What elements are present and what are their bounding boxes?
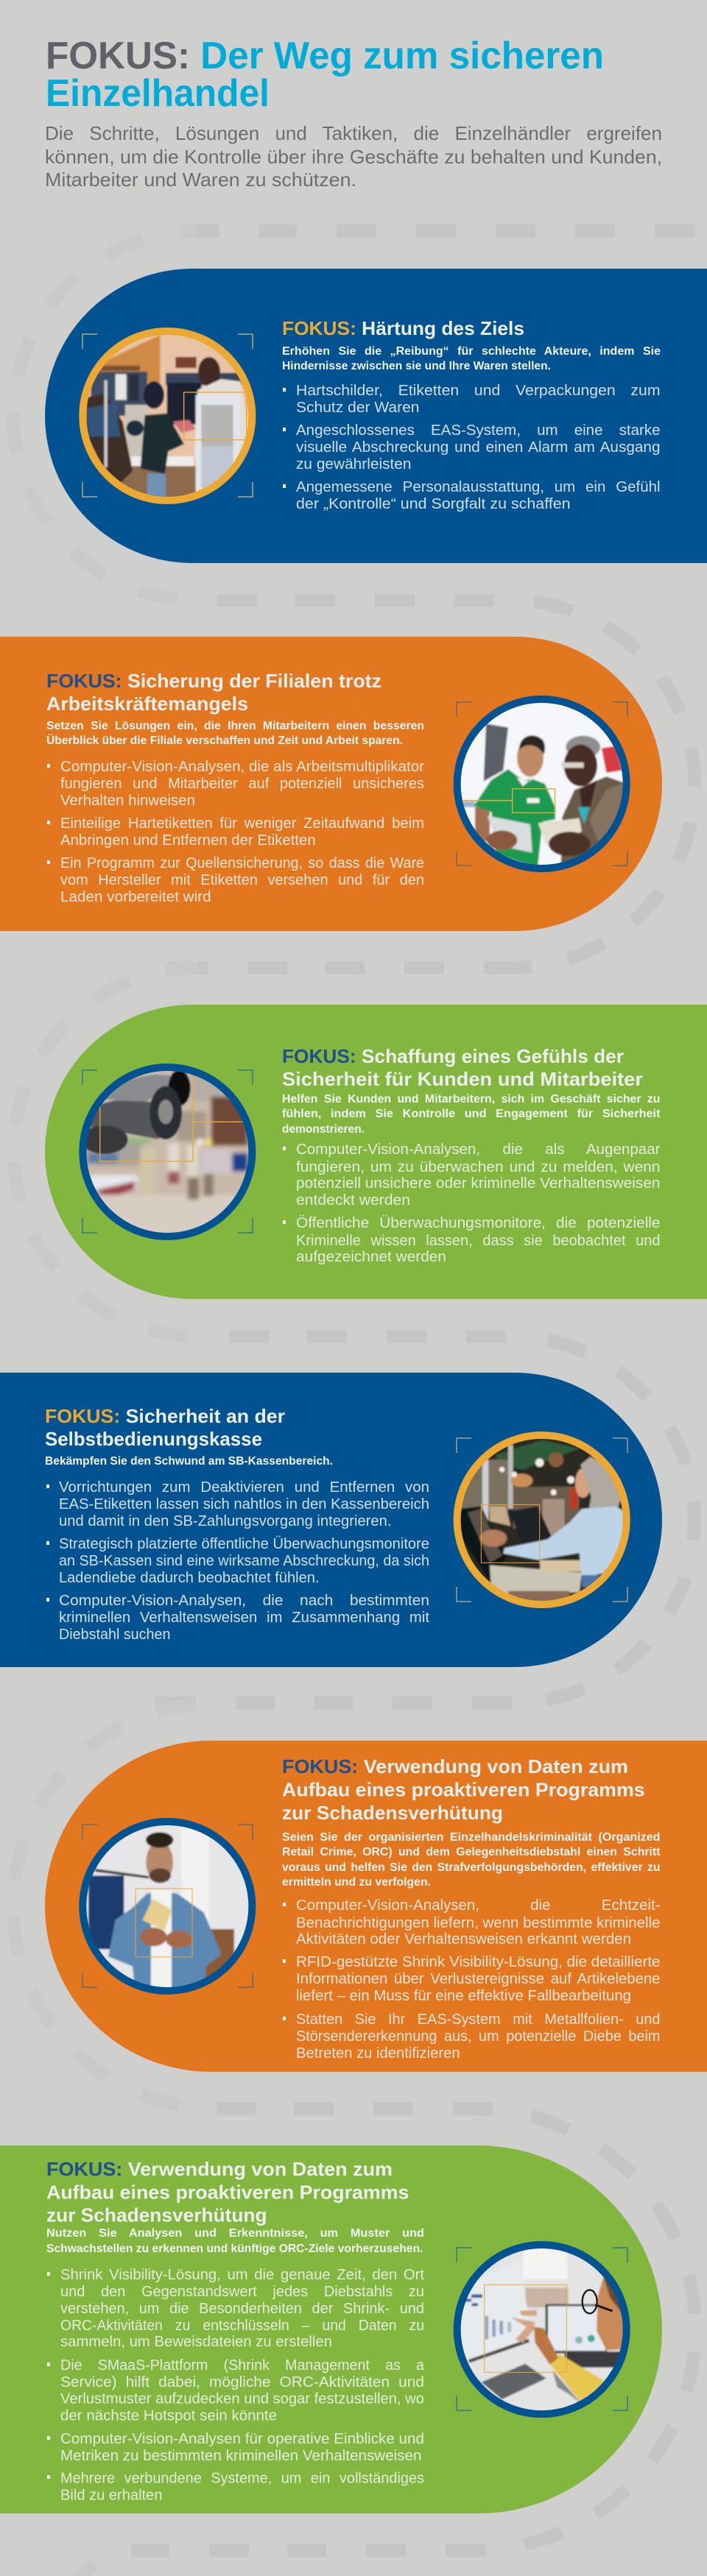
bullet list: ORC-Aktivitäten zu entschlüsseln – und Daten zu bbox=[60, 2318, 424, 2334]
bullet list bbox=[283, 1897, 660, 2062]
bullet list: Computer-Vision-Analysen für operative Einblicke und bbox=[60, 2431, 424, 2447]
intro text: Die Schritte, Lösungen und Taktiken, die Einzelhändler ergreifen bbox=[45, 122, 662, 144]
bullet list: Ein Programm zur Quellensicherung, so dass die Ware bbox=[60, 855, 424, 871]
photo: security camera bbox=[81, 1067, 256, 1239]
title bbox=[46, 35, 604, 115]
corner brackets bbox=[457, 702, 627, 866]
panel: Selbstbedienungskasse bbox=[0, 1373, 662, 1667]
heading bbox=[282, 1045, 643, 1090]
corner brackets bbox=[82, 1070, 253, 1233]
bullet list bbox=[283, 1142, 661, 1265]
subheading: Retail Crime, ORC) und dem Gelegenheitsdiebstahl einen Schritt bbox=[282, 1846, 661, 1858]
bullet list: Hartschilder, Etiketten und Verpackungen zum bbox=[296, 383, 660, 399]
heading: zur Schadensverhütung bbox=[282, 1802, 503, 1824]
bullet list: Mehrere verbundene Systeme, um ein vollständiges bbox=[60, 2470, 424, 2486]
intro text bbox=[45, 122, 662, 191]
title: FOKUS: Der Weg zum sicheren bbox=[46, 35, 604, 77]
photo: man hiding item bbox=[81, 1822, 256, 1993]
subheading bbox=[282, 1831, 661, 1889]
subheading: Seien Sie der organisierten Einzelhandelskriminalität (Organized bbox=[282, 1831, 660, 1844]
panel: proaktives Programm (green) bbox=[0, 2145, 662, 2513]
bullet list: der „Kontrolle“ und Sorgfalt zu schaffen bbox=[296, 496, 571, 512]
bullet list: liefert – ein Muss für eine effektive Fallbearbeitung bbox=[296, 1988, 631, 2004]
subheading bbox=[282, 1093, 661, 1136]
bullet list bbox=[46, 1479, 429, 1643]
heading bbox=[46, 670, 381, 715]
bullet list: Betreten zu identifizieren bbox=[296, 2045, 460, 2062]
heading: FOKUS: Verwendung von Daten zum bbox=[46, 2158, 393, 2180]
bullet list: Computer-Vision-Analysen, die als Arbeitsmultiplikator bbox=[60, 759, 424, 775]
bullet list bbox=[47, 2267, 425, 2504]
panel: Härtung des Ziels bbox=[45, 269, 707, 563]
subheading bbox=[46, 720, 424, 747]
heading: FOKUS: Sicherheit an der bbox=[45, 1405, 285, 1427]
bullet list: vom Hersteller mit Etiketten versehen und für den bbox=[60, 872, 424, 888]
subheading: ermitteln und zu verfolgen. bbox=[282, 1876, 431, 1889]
bullet list: aufgezeichnet werden bbox=[296, 1249, 446, 1265]
bullet list: zu gewährleisten bbox=[296, 456, 411, 473]
heading: FOKUS: Härtung des Ziels bbox=[282, 317, 524, 339]
subheading: voraus und helfen Sie den Strafverfolgungsbehörden, effektiver zu bbox=[282, 1861, 660, 1874]
bullet list: Aktivitäten oder Verhaltensweisen erkannt werden bbox=[296, 1931, 631, 1947]
heading: Aufbau eines proaktiveren Programms bbox=[282, 1778, 645, 1800]
bullet list: an SB-Kassen sind eine wirksame Abschreckung, da sich bbox=[59, 1553, 429, 1569]
corner brackets bbox=[457, 2248, 627, 2410]
heading: zur Schadensverhütung bbox=[46, 2204, 267, 2226]
bullet list: Shrink Visibility-Lösung, um die genaue Zeit, den Ort bbox=[60, 2267, 424, 2283]
intro text: Mitarbeiter und Waren zu schützen. bbox=[45, 169, 356, 191]
subheading: Schwachstellen zu erkennen und künftige ORC-Ziele vorherzusehen. bbox=[46, 2243, 423, 2255]
intro text: können, um die Kontrolle über ihre Geschäfte zu behalten und Kunden, bbox=[45, 146, 662, 168]
bullet list: Computer-Vision-Analysen, die als Augenpaar bbox=[296, 1142, 661, 1158]
photo: staff and customer bbox=[457, 699, 628, 871]
bullet list: Einteilige Hartetiketten für weniger Zeitaufwand beim bbox=[60, 815, 424, 832]
bullet list: Angeschlossenes EAS-System, um eine starke bbox=[296, 422, 660, 439]
bullet list: Computer-Vision-Analysen, die Echtzeit- bbox=[296, 1897, 660, 1914]
subheading: Erhöhen Sie die „Reibung“ für schlechte Akteure, indem Sie bbox=[282, 345, 661, 358]
bullet list: Computer-Vision-Analysen, die nach bestimmten bbox=[59, 1593, 429, 1609]
heading: FOKUS: Sicherung der Filialen trotz bbox=[46, 670, 381, 692]
bullet list: Benachrichtigungen liefern, wenn bestimmte kriminelle bbox=[296, 1915, 660, 1931]
heading bbox=[45, 1405, 285, 1450]
subheading bbox=[46, 2227, 424, 2255]
bullet list: RFID-gestützte Shrink Visibility-Lösung, die detaillierte bbox=[296, 1954, 660, 1970]
bullet list: verstehen, um die Besonderheiten der Shrink- und bbox=[60, 2301, 424, 2317]
subheading: demonstrieren. bbox=[282, 1123, 365, 1136]
photo: store kiosk bbox=[81, 331, 253, 503]
bullet list: EAS-Etiketten lassen sich nahtlos in den Kassenbereich bbox=[59, 1496, 429, 1512]
bullet list: Öffentliche Überwachungsmonitore, die potenzielle bbox=[296, 1215, 660, 1231]
bullet list: der nächste Hotspot sein könnte bbox=[60, 2408, 277, 2424]
subheading: Überblick über die Filiale verschaffen und Zeit und Arbeit sparen. bbox=[46, 733, 403, 747]
photo: analyst at monitors bbox=[457, 2245, 628, 2416]
bullet list: und den Gegenstandswert jedes Diebstahls zu bbox=[60, 2284, 424, 2300]
heading: Selbstbedienungskasse bbox=[45, 1428, 262, 1450]
heading: FOKUS: Verwendung von Daten zum bbox=[282, 1755, 628, 1777]
bullet list: potenziell unsichere oder kriminelle Verhaltensweisen bbox=[296, 1175, 660, 1192]
heading bbox=[46, 2158, 409, 2226]
panel: Sicherung der Filialen bbox=[0, 637, 662, 931]
corner brackets bbox=[82, 1825, 253, 1987]
bullet list bbox=[47, 759, 424, 905]
bullet list bbox=[283, 383, 660, 512]
subheading: Helfen Sie Kunden und Mitarbeitern, sich im Geschäft sicher zu bbox=[282, 1093, 660, 1105]
bullet list: Diebstahl suchen bbox=[59, 1627, 171, 1643]
subheading: Nutzen Sie Analysen und Erkenntnisse, um Muster und bbox=[46, 2227, 424, 2240]
bullet list: Metriken zu bestimmten kriminellen Verhaltensweisen bbox=[60, 2448, 421, 2464]
panel: Gefühl der Sicherheit bbox=[45, 1005, 707, 1299]
photo: self-checkout bbox=[457, 1435, 628, 1607]
bullet list: Verhalten hinweisen bbox=[60, 793, 195, 809]
bullet list: Informationen über Verlustereignisse auf Artikelebene bbox=[296, 1971, 660, 1987]
bullet list: Bild zu erhalten bbox=[60, 2488, 162, 2504]
bullet list: und damit in den SB-Zahlungsvorgang integrieren. bbox=[59, 1513, 392, 1529]
subheading: fühlen, indem Sie Kontrolle und Engagement für Sicherheit bbox=[282, 1108, 661, 1120]
bullet list: Statten Sie Ihr EAS-System mit Metallfolien- und bbox=[296, 2011, 660, 2028]
bullet list: fungieren, um zu überwachen und zu melden, wenn bbox=[296, 1159, 660, 1175]
heading: Arbeitskräftemangels bbox=[46, 693, 248, 715]
bullet list: fungieren und Mitarbeiter auf potenziell unsicheres bbox=[60, 776, 424, 792]
bullet list: sammeln, um Beweisdateien zu erstellen bbox=[60, 2334, 332, 2350]
bullet list: Service) hilft dabei, mögliche ORC-Aktivitäten und bbox=[60, 2374, 424, 2391]
bullet list: Ladendiebe dadurch beobachtet fühlen. bbox=[59, 1570, 320, 1586]
bullet list: Kriminelle wissen lassen, dass sie beobachtet und bbox=[296, 1233, 660, 1249]
bullet list: Verlustmuster aufzudecken und sogar festzustellen, wo bbox=[60, 2391, 424, 2407]
bullet list: Strategisch platzierte öffentliche Überwachungsmonitore bbox=[59, 1536, 429, 1552]
heading: Sicherheit für Kunden und Mitarbeiter bbox=[282, 1068, 643, 1090]
bullet list: visuelle Abschreckung und einen Alarm am Ausgang bbox=[296, 439, 660, 456]
corner brackets bbox=[82, 334, 253, 497]
heading: Aufbau eines proaktiveren Programms bbox=[46, 2182, 409, 2204]
bullet list: entdeckt werden bbox=[296, 1192, 410, 1209]
heading: FOKUS: Schaffung eines Gefühls der bbox=[282, 1045, 624, 1067]
bullet list: Vorrichtungen zum Deaktivieren und Entfernen von bbox=[59, 1479, 429, 1496]
bullet list: Laden vorbereitet wird bbox=[60, 889, 211, 905]
subheading: Bekämpfen Sie den Schwund am SB-Kassenbereich. bbox=[45, 1455, 333, 1468]
subheading: Setzen Sie Lösungen ein, die Ihren Mitarbeitern einen besseren bbox=[46, 720, 424, 732]
corner brackets bbox=[457, 1438, 627, 1602]
bullet list: Schutz der Waren bbox=[296, 400, 420, 416]
bullet list: Störsendererkennung aus, um potenzielle Diebe beim bbox=[296, 2028, 660, 2045]
bullet list: Anbringen und Entfernen der Etiketten bbox=[60, 832, 316, 849]
subheading bbox=[282, 345, 661, 372]
bullet list: Die SMaaS-Plattform (Shrink Management as a bbox=[60, 2357, 425, 2374]
title: Einzelhandel bbox=[46, 72, 270, 115]
bullet list: Angemessene Personalausstattung, um ein Gefühl bbox=[296, 479, 660, 495]
subheading: Hindernisse zwischen sie und Ihre Waren stellen. bbox=[282, 360, 551, 372]
panel: proaktives Programm (orange) bbox=[45, 1741, 707, 2072]
bullet list: kriminellen Verhaltensweisen im Zusammenhang mit bbox=[59, 1610, 429, 1626]
heading bbox=[282, 1755, 645, 1824]
